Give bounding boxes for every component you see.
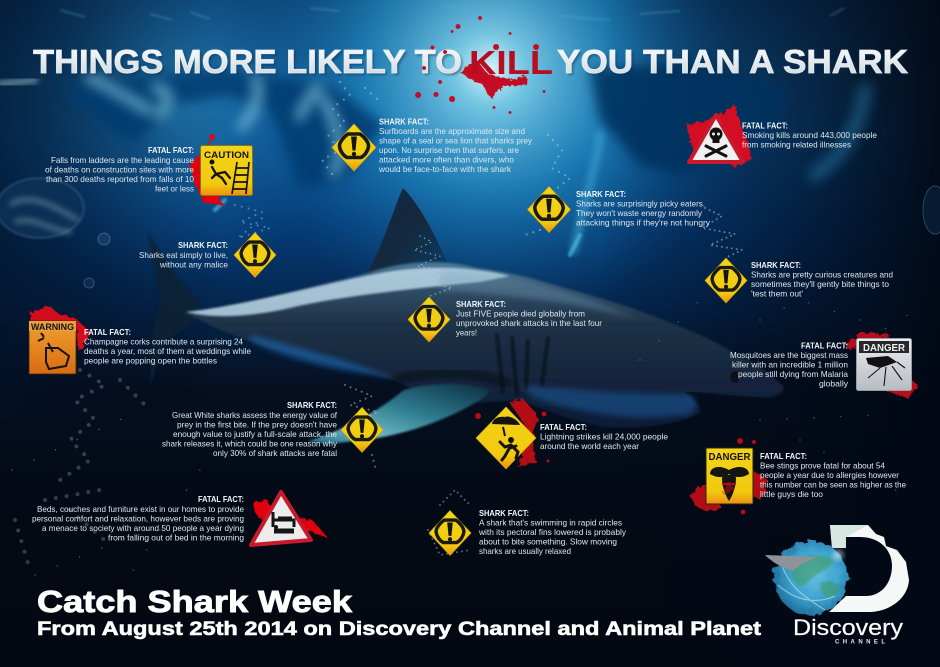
text: mosquito fact: Mosquitoes are the biggest mass — [730, 351, 848, 360]
text: rapid circles fact: about to bite something. Slow moving — [479, 538, 617, 546]
icon: bed warning triangle — [251, 492, 328, 545]
text: ladder fact: FATAL FACT: — [148, 146, 194, 155]
icon: caution ladder sign — [190, 134, 252, 207]
text: surfboards fact — [378, 118, 533, 174]
text: bee fact: little guys die too — [760, 490, 823, 499]
text: surfboards fact: shape of a seal or sea lion that sharks prey — [379, 136, 533, 146]
text: rapid circles fact — [478, 509, 627, 556]
icon: caution ladder sign: CAUTION — [204, 150, 249, 161]
text: smoking fact: Smoking kills around 443,000 people — [742, 131, 877, 140]
icon: shark warning diamond — [341, 408, 383, 452]
text: bee fact: FATAL FACT: — [760, 452, 807, 461]
text: champagne fact: deaths a year, most of them at weddings while — [84, 347, 251, 356]
text: five deaths fact: SHARK FACT: — [456, 300, 506, 309]
text: five deaths fact: years! — [456, 328, 477, 338]
fatal fact: beds — [32, 492, 328, 545]
text: picky eaters fact: Sharks are surprisingly picky eaters. — [576, 200, 705, 208]
title: THINGS MORE LIKELY TO — [35, 45, 464, 82]
text: mosquito fact: killer with an incredible 1 million — [732, 360, 848, 370]
shark: tail — [148, 232, 202, 387]
text: lightning fact: around the world each year — [540, 442, 639, 451]
text: champagne fact: people are popping open the bottles — [84, 356, 217, 366]
text: rapid circles fact: A shark that's swimming in rapid circles — [479, 518, 622, 528]
title: KILL — [469, 44, 553, 81]
text: bee fact: people a year due to allergies however — [760, 471, 899, 480]
text: bee fact: this number can be seen as higher as the — [760, 481, 906, 490]
text: champagne fact: FATAL FACT: — [84, 328, 131, 337]
shark: blue underside — [520, 385, 696, 417]
text: champagne fact: Champagne corks contribute a surprising 24 — [84, 338, 243, 346]
icon: danger mosquito sign: DANGER — [863, 343, 906, 354]
text: lightning fact — [540, 423, 668, 451]
text: mosquito fact: FATAL FACT: — [801, 342, 848, 350]
text: surfboards fact: upon. No surprise then that surfers, are — [379, 146, 519, 155]
text: beds fact — [32, 495, 244, 542]
text: curious fact: sometimes they'll gently bite things to — [751, 280, 889, 289]
fatal fact: ladders — [45, 134, 252, 207]
icon: danger bee sign: DANGER — [708, 452, 751, 463]
text: bee fact: Bee stings prove fatal for about 54 — [760, 462, 885, 471]
title: THINGS MORE LIKELY TO — [33, 43, 462, 80]
text: rapid circles fact: with its pectoral fins lowered is probably — [478, 528, 627, 537]
text: ladder fact: than 300 deaths reported from falls of 10 — [46, 175, 194, 184]
swimmers silhouettes in background — [0, 60, 865, 255]
text: five deaths fact — [456, 300, 602, 338]
text: beds fact: from falling out of bed in the morning — [108, 534, 244, 542]
text: ladder fact — [45, 146, 194, 194]
icon: shark warning diamond — [429, 511, 471, 555]
water droplets on the left — [0, 178, 940, 288]
text: energy value fact: enough value to justify a full-scale attack, the — [173, 430, 337, 439]
text: picky eaters fact: SHARK FACT: — [576, 190, 626, 199]
text: lightning fact: Lightning strikes kill 24,000 people — [540, 432, 668, 442]
text: bee fact — [760, 452, 906, 499]
fatal fact: champagne corks — [29, 306, 251, 374]
text: energy value fact — [162, 401, 338, 458]
title: YOU THAN A SHARK — [557, 43, 908, 80]
text: beds fact: Beds, couches and furniture exist in our homes to provide — [37, 505, 244, 514]
text: beds fact: a menace to society with around 50 people a year dying — [42, 524, 244, 533]
fatal fact: smoking — [688, 105, 877, 168]
text: curious fact: 'test them out' — [751, 290, 803, 298]
logo: globe with shark fin — [765, 541, 848, 615]
call to action: catch shark week: Catch Shark Week — [37, 584, 353, 619]
text: energy value fact: only 30% of shark attacks are fatal — [213, 449, 337, 458]
blood splatter behind KILL — [415, 16, 546, 114]
text: eat to live fact: without any malice — [159, 260, 228, 270]
text: energy value fact: prey in the first bite. If the prey doesn't have — [177, 420, 337, 429]
text: ladder fact: Falls from ladders are the leading cause — [51, 156, 194, 165]
icon: danger mosquito sign — [846, 332, 918, 398]
icon: shark warning diamond — [527, 186, 571, 233]
shark: pectoral fin — [308, 384, 490, 443]
logo: white D — [829, 525, 909, 612]
fatal fact: lightning — [475, 398, 668, 469]
shark fact: surfboards — [332, 118, 533, 174]
title: YOU THAN A SHARK — [559, 45, 910, 82]
text: ladder fact: feet or less — [155, 184, 194, 194]
text: smoking fact — [742, 122, 877, 150]
icon: shark warning diamond — [234, 233, 276, 277]
text: eat to live fact: SHARK FACT: — [178, 241, 228, 250]
text: champagne fact — [84, 328, 251, 366]
shark fact: five deaths — [408, 297, 602, 342]
call to action: catch shark week — [37, 584, 762, 640]
text: mosquito fact: globally — [819, 380, 849, 388]
call to action: catch shark week: From August 25th 2014 on Discovery Channel and Animal Planet — [37, 618, 762, 640]
text: energy value fact: shark releases it, which could be one reason why — [162, 439, 338, 448]
logo: wordmark: Discovery — [793, 615, 903, 640]
icon: lightning diamond sign — [475, 398, 550, 469]
text: surfboards fact: would be face-to-face with the shark — [378, 165, 512, 174]
text: surfboards fact: Surfboards are the approximate size and — [379, 127, 525, 136]
text: surfboards fact: SHARK FACT: — [379, 118, 429, 126]
text: eat to live fact: Sharks eat simply to live, — [139, 251, 228, 260]
icon: shark warning diamond — [408, 297, 450, 342]
text: mosquito fact: people still dying from Malaria — [738, 370, 848, 379]
icon: skull warning triangle — [688, 105, 752, 168]
text: surfboards fact: attacked more often than divers, who — [379, 156, 514, 164]
text: rapid circles fact: SHARK FACT: — [479, 509, 529, 518]
icon: warning champagne sign — [29, 306, 90, 374]
text: curious fact: SHARK FACT: — [751, 261, 801, 270]
icon: shark warning diamond — [332, 124, 376, 171]
shark fact: rapid circles — [429, 509, 627, 556]
text: curious fact: Sharks are pretty curious creatures and — [751, 270, 893, 280]
icon: shark warning diamond — [705, 258, 747, 303]
shark: pale back highlight — [186, 268, 510, 316]
icon: warning champagne sign: WARNING — [31, 322, 74, 332]
text: energy value fact: SHARK FACT: — [287, 401, 337, 410]
text: beds fact: personal comfort and relaxation, however beds are proving — [32, 514, 244, 524]
text: picky eaters fact: They won't waste energy randomly — [576, 209, 703, 218]
fatal fact: bee stings — [690, 438, 906, 514]
text: five deaths fact: Just FIVE people died globally from — [456, 310, 585, 318]
text: beds fact: FATAL FACT: — [198, 495, 244, 504]
text: ladder fact: of deaths on construction sites with more — [45, 166, 194, 174]
shark: gills — [497, 335, 548, 395]
shark fact: curious — [705, 258, 893, 303]
shark: body — [184, 262, 784, 428]
text: energy value fact: Great White sharks assess the energy value of — [172, 411, 338, 420]
icon: danger bee sign — [690, 438, 768, 514]
text: curious fact — [751, 261, 893, 298]
shark fact: picky eaters — [527, 186, 711, 233]
shark fact: energy value — [162, 401, 383, 458]
shark: dorsal fin — [367, 188, 447, 274]
text: five deaths fact: unprovoked shark attacks in the last four — [456, 319, 602, 328]
discovery channel logo — [765, 525, 909, 646]
text: mosquito fact — [730, 342, 849, 388]
shark: eye and mouth — [686, 372, 765, 398]
text: eat to live fact — [139, 241, 228, 270]
text: lightning fact: FATAL FACT: — [540, 423, 587, 432]
great white shark — [148, 188, 784, 443]
bubble trails — [12, 82, 925, 590]
text: rapid circles fact: sharks are usually relaxed — [479, 547, 571, 556]
text: picky eaters fact: attacking things if they're not hungry — [576, 218, 711, 228]
text: smoking fact: FATAL FACT: — [742, 122, 788, 130]
fatal fact: mosquitoes — [730, 332, 918, 398]
logo: wordmark: CHANNEL — [835, 640, 885, 646]
text: picky eaters fact — [576, 190, 711, 228]
shark fact: eat to live — [139, 233, 276, 277]
title — [33, 16, 910, 114]
text: smoking fact: from smoking related illnesses — [742, 140, 851, 150]
